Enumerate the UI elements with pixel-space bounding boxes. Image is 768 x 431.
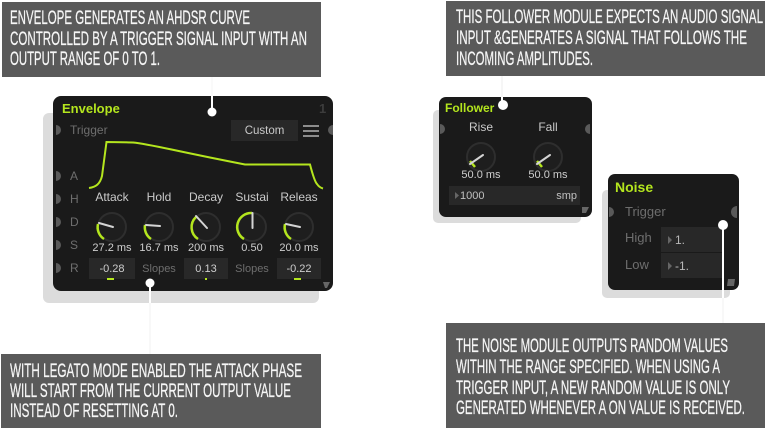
knob values: 200 ms	[188, 242, 225, 254]
trigger label: Trigger	[70, 123, 108, 137]
custom button: Custom	[245, 125, 284, 137]
knob values: 20.0 ms	[279, 242, 319, 254]
ports and letter labels: H	[70, 192, 79, 206]
knob labels: Sustai	[235, 190, 269, 204]
noise ports	[609, 206, 737, 218]
resize corner	[323, 282, 330, 288]
follower knob labels: Rise	[469, 120, 493, 134]
follower values: 50.0 ms	[461, 169, 501, 181]
knob values: 0.50	[241, 242, 263, 254]
module number: 1	[319, 101, 326, 116]
smoothing field: 1000	[460, 190, 484, 202]
panel: envelope caption: CONTROLLED BY A TRIGGER SIGNAL INPUT WITH AN	[10, 29, 307, 50]
resize corner	[582, 207, 589, 213]
knob: attack	[98, 213, 126, 241]
slope fields: 0.13	[195, 263, 217, 275]
panel: envelope caption: OUTPUT RANGE OF 0 TO 1.	[10, 49, 160, 70]
callout: envelope top pointer	[208, 77, 216, 116]
ports and letter labels: D	[70, 215, 79, 229]
slope fields: -0.28	[99, 263, 125, 275]
noise labels	[625, 204, 666, 272]
follower knob labels: Fall	[538, 120, 558, 134]
knob: sustain	[237, 213, 266, 241]
knob: decay	[192, 213, 220, 241]
ports and letter labels	[56, 125, 333, 275]
smoothing field	[449, 186, 580, 205]
panel: legato caption: INSTEAD OF RESETTING AT 0.	[10, 401, 178, 422]
knob: release	[285, 213, 313, 241]
follower title: Follower	[445, 101, 495, 115]
follower values	[461, 169, 568, 181]
low field: -1.	[675, 259, 689, 273]
knob: hold	[145, 213, 173, 241]
follower values: 50.0 ms	[528, 169, 568, 181]
noise title: Noise	[615, 179, 653, 195]
panel: follower caption	[446, 1, 765, 76]
ports and letter labels: R	[70, 261, 79, 275]
follower ports	[440, 124, 590, 134]
panel: noise module	[602, 174, 739, 298]
panel: legato caption	[1, 354, 321, 428]
slope fields	[89, 258, 321, 280]
callout: envelope bottom pointer	[146, 278, 154, 354]
callout: noise pointer	[718, 220, 728, 323]
slope fields: Slopes	[235, 263, 269, 275]
panel: noise caption	[446, 323, 765, 428]
panel: envelope module	[43, 96, 333, 303]
custom button	[231, 120, 298, 141]
panel: legato caption: WITH LEGATO MODE ENABLED THE ATTACK PHASE	[10, 361, 302, 382]
AHDSR curve	[89, 142, 323, 188]
panel: legato caption: WILL START FROM THE CURRENT OUTPUT VALUE	[10, 381, 291, 402]
smoothing field: smp	[556, 190, 577, 202]
noise labels: Trigger	[625, 204, 666, 219]
noise labels: High	[625, 230, 652, 245]
panel: follower module	[433, 97, 592, 223]
panel: envelope caption: ENVELOPE GENERATES AN AHDSR CURVE	[10, 8, 250, 29]
follower knob labels	[469, 120, 558, 134]
resize corner	[727, 279, 735, 286]
knob labels: Decay	[189, 190, 223, 204]
knob labels: Releas	[280, 190, 318, 204]
knob labels	[95, 190, 318, 204]
ports and letter labels: S	[70, 238, 78, 252]
knob labels: Hold	[147, 190, 171, 204]
slope fields: -0.22	[286, 263, 312, 275]
envelope title: Envelope	[62, 101, 120, 116]
slope fields: Slopes	[142, 263, 176, 275]
knob values	[92, 242, 319, 254]
callout: follower pointer	[498, 76, 508, 110]
knob: fall	[534, 143, 562, 171]
knob labels: Attack	[95, 190, 130, 204]
panel: envelope caption	[2, 2, 321, 77]
knob values: 16.7 ms	[139, 242, 179, 254]
high field: 1.	[675, 233, 685, 247]
icon: menu	[303, 125, 319, 137]
panel: follower caption: INCOMING AMPLITUDES.	[456, 49, 593, 70]
noise labels: Low	[625, 257, 649, 272]
knob values: 27.2 ms	[92, 242, 132, 254]
ports and letter labels: A	[70, 169, 78, 183]
knob: rise	[467, 143, 495, 171]
